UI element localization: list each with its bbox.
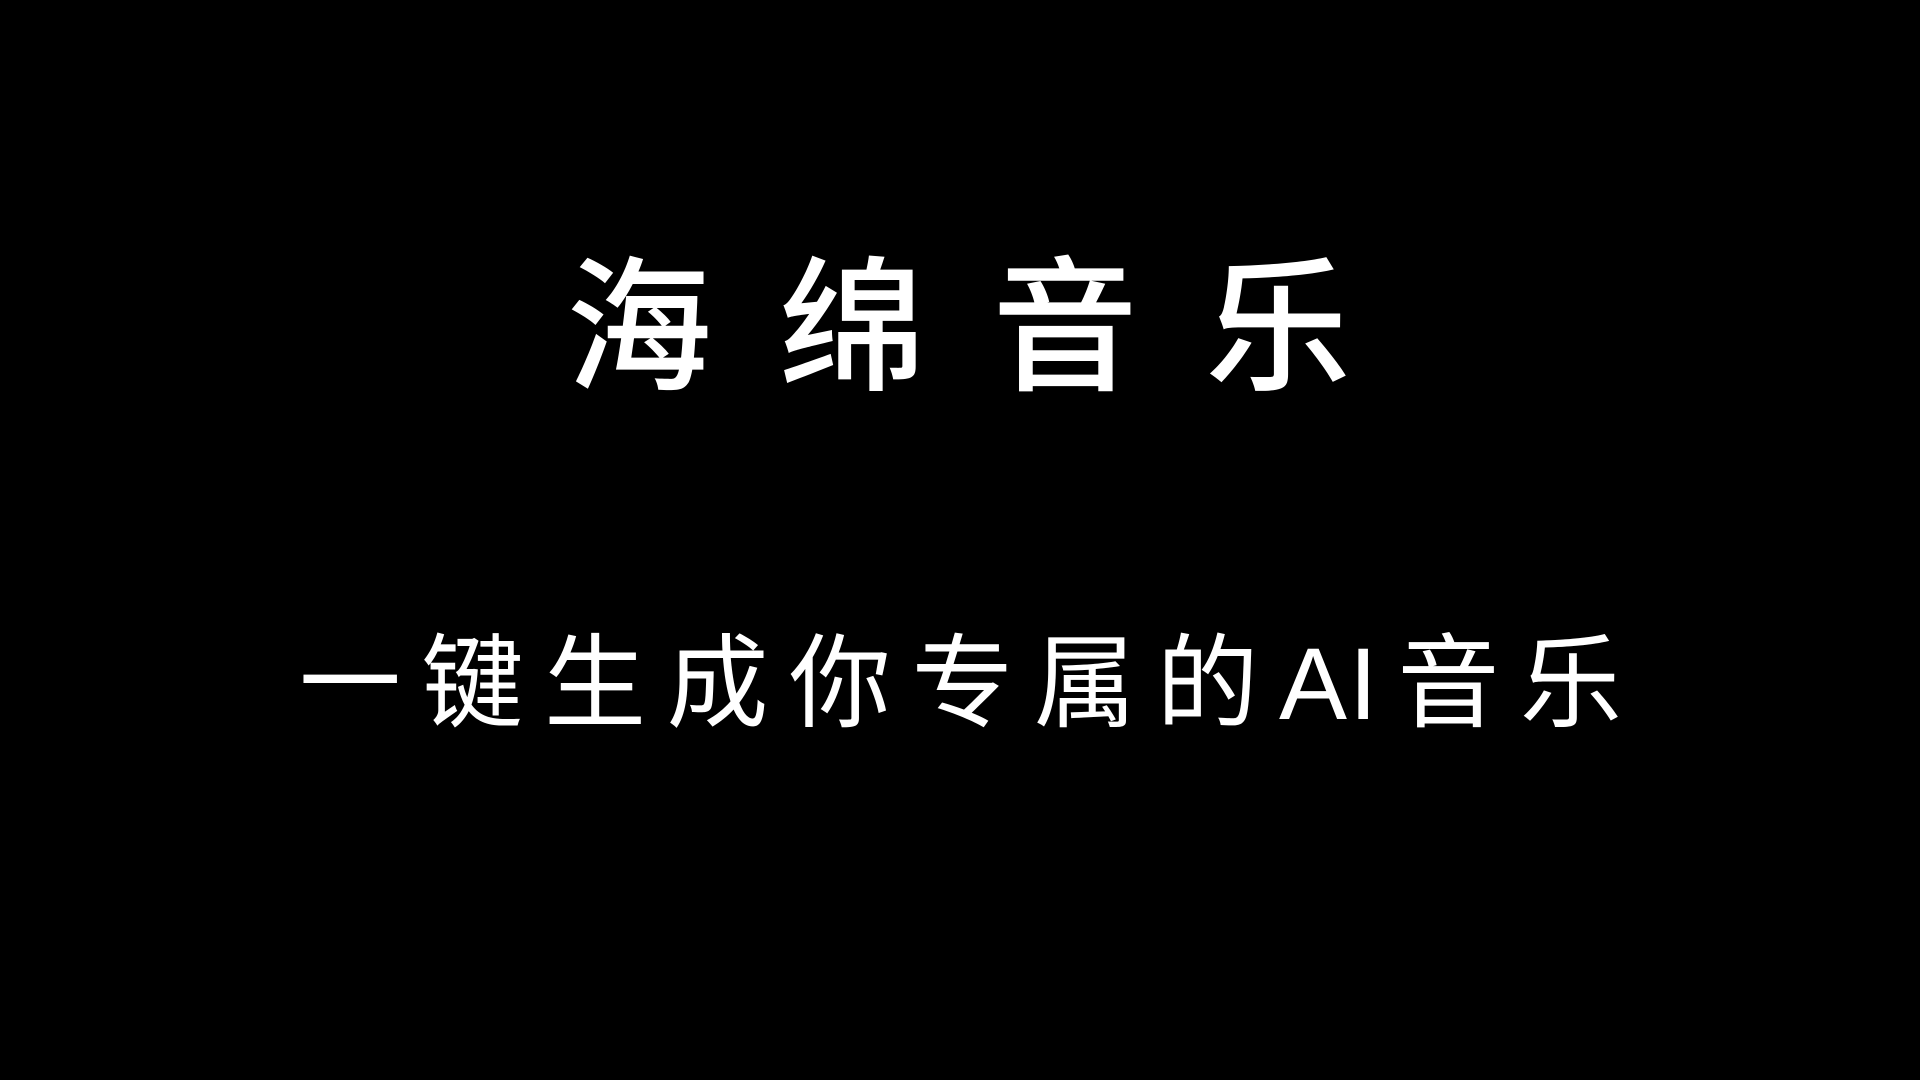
subtitle: 一键生成你专属的AI音乐 <box>299 602 1642 749</box>
title: 海绵音乐 <box>566 211 1418 422</box>
